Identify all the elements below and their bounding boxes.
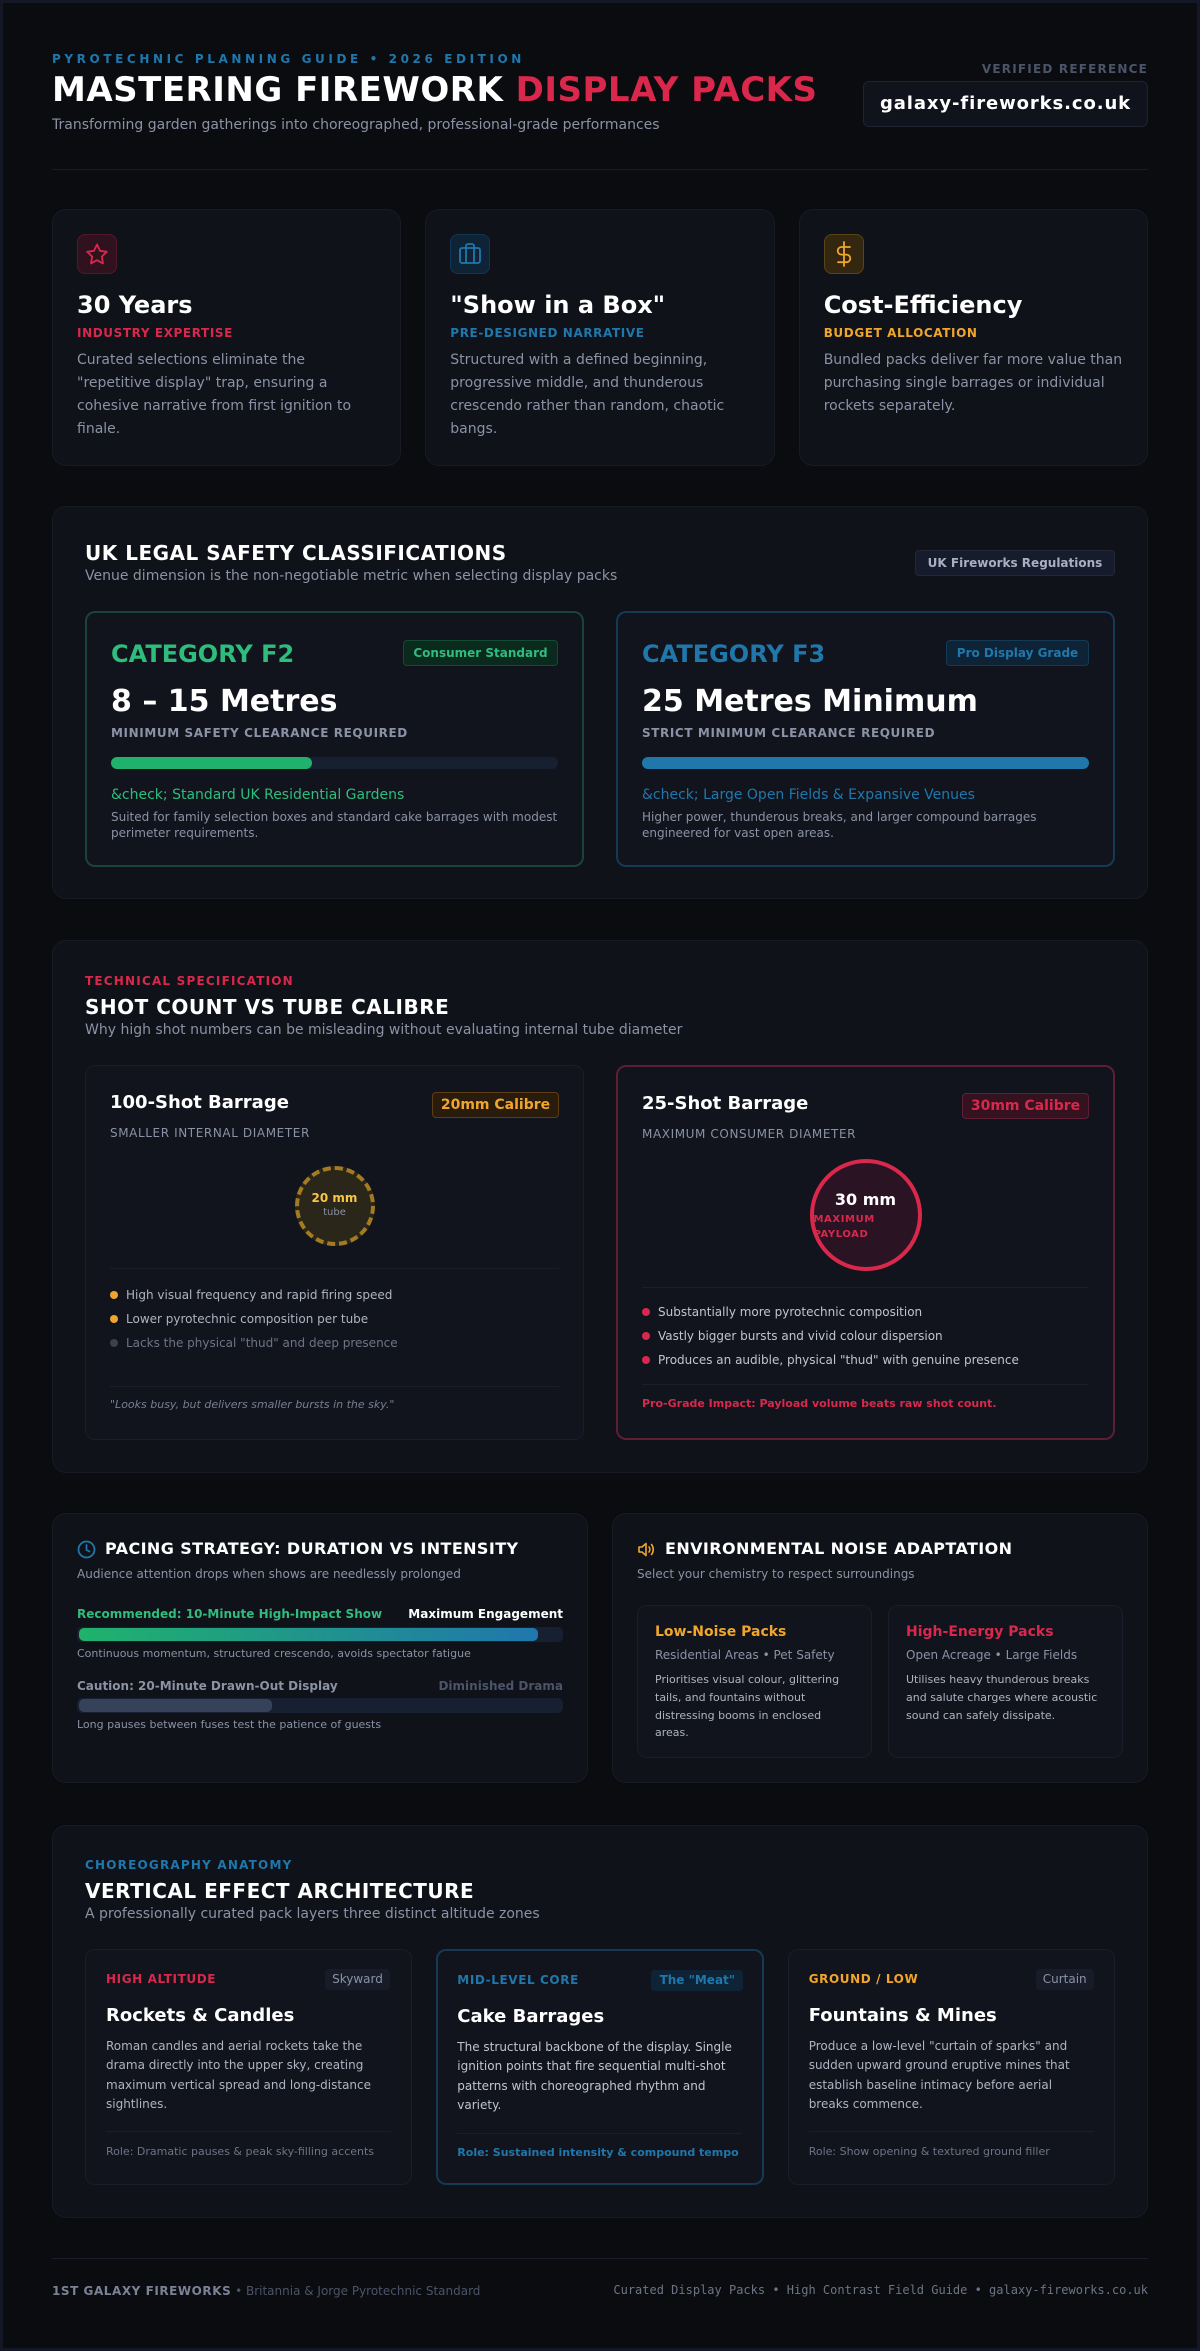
heading: SHOT COUNT VS TUBE CALIBRE — [85, 995, 449, 1019]
verified reference label: VERIFIED REFERENCE — [982, 62, 1148, 76]
label: Caution: 20-Minute Drawn-Out Display — [77, 1679, 338, 1693]
row: 10-minute show — [77, 1607, 563, 1660]
feature: Substantially more pyrotechnic composition — [658, 1305, 922, 1319]
badge: Consumer Standard — [413, 646, 548, 660]
feature: Vastly bigger bursts and vivid colour dispersion — [658, 1329, 943, 1343]
role: Role: Show opening & textured ground filler — [809, 2145, 1050, 2158]
badge: Curtain — [1043, 1972, 1087, 1986]
card text — [457, 2040, 732, 2112]
card subtitle: Open Acreage • Large Fields — [906, 1648, 1077, 1662]
card text: areas. — [655, 1726, 689, 1739]
value: Maximum Engagement — [408, 1607, 563, 1621]
card title: 100-Shot Barrage — [110, 1092, 289, 1113]
zone label: GROUND / LOW — [809, 1972, 918, 1986]
diameter label: 30 mm — [835, 1190, 896, 1209]
badge — [432, 1092, 559, 1118]
card: high-energy packs — [888, 1605, 1123, 1758]
stat text: Curated selections eliminate the — [77, 352, 305, 368]
zone label: MID-LEVEL CORE — [457, 1973, 579, 1987]
card text: tails, and fountains without — [655, 1691, 805, 1704]
subtitle: Transforming garden gatherings into choreographed, professional-grade performances — [52, 117, 660, 133]
panel: UK legal safety classifications — [52, 506, 1148, 899]
badge: regulations: UK Fireworks Regulations — [928, 556, 1102, 570]
description — [111, 810, 557, 840]
tube diagram: 30 mm — [810, 1159, 922, 1271]
card: 30 years — [52, 209, 401, 466]
stat text: progressive middle, and thunderous — [450, 375, 703, 391]
card text: Utilises heavy thunderous breaks — [906, 1673, 1089, 1686]
card text: maximum vertical spread and long-distance — [106, 2078, 371, 2092]
tube diagram: 20 mm — [294, 1166, 374, 1246]
venue: &check; Large Open Fields & Expansive Venues — [642, 787, 975, 803]
badge: 30mm Calibre — [971, 1098, 1080, 1114]
card: 100-shot barrage — [85, 1065, 584, 1440]
card text: sightlines. — [106, 2097, 167, 2111]
heading: ENVIRONMENTAL NOISE ADAPTATION — [665, 1539, 1012, 1558]
badge: 20mm Calibre — [441, 1097, 550, 1113]
panel: environmental noise adaptation — [612, 1513, 1148, 1783]
stat label: PRE-DESIGNED NARRATIVE — [450, 326, 645, 340]
eyebrow: CHOREOGRAPHY ANATOMY — [85, 1858, 292, 1872]
footnote: "Looks busy, but delivers smaller bursts in the sky." — [110, 1398, 394, 1411]
subheading: Select your chemistry to respect surroundings — [637, 1567, 915, 1581]
payload label: MAXIMUM — [814, 1214, 875, 1225]
badge — [962, 1093, 1089, 1119]
badge: regulations — [915, 550, 1115, 576]
zone label: HIGH ALTITUDE — [106, 1972, 216, 1986]
description: Higher power, thunderous breaks, and larger compound barrages — [642, 810, 1036, 824]
note: Continuous momentum, structured crescendo, avoids spectator fatigue — [77, 1647, 471, 1660]
subheading: Audience attention drops when shows are needlessly prolonged — [77, 1567, 461, 1581]
card: category F2 — [85, 611, 584, 867]
feature: Lacks the physical "thud" and deep presence — [126, 1336, 398, 1350]
payload label — [814, 1214, 875, 1240]
heading: UK LEGAL SAFETY CLASSIFICATIONS — [85, 541, 507, 565]
caption: MAXIMUM CONSUMER DIAMETER — [642, 1127, 856, 1141]
clearance bar — [642, 757, 1089, 769]
stat label: BUDGET ALLOCATION — [824, 326, 978, 340]
role: Role: Sustained intensity & compound tempo — [457, 2146, 739, 2159]
card: high altitude — [85, 1949, 412, 2185]
description: Suited for family selection boxes and standard cake barrages with modest — [111, 810, 557, 824]
card: 25-shot barrage — [616, 1065, 1115, 1440]
card title: Low-Noise Packs — [655, 1624, 786, 1640]
badge: Pro Display Grade — [957, 646, 1078, 660]
feature: Lower pyrotechnic composition per tube — [126, 1312, 368, 1326]
distance: 8 – 15 Metres — [111, 684, 338, 719]
card text: breaks commence. — [809, 2097, 923, 2111]
caption: STRICT MINIMUM CLEARANCE REQUIRED — [642, 726, 935, 740]
card title: Cake Barrages — [457, 2006, 604, 2027]
distance: 25 Metres Minimum — [642, 684, 978, 719]
clearance bar — [111, 757, 558, 769]
card text — [106, 2039, 371, 2111]
card text — [809, 2039, 1070, 2111]
card text: ignition points that fire sequential multi-shot — [457, 2059, 726, 2073]
stat text: Bundled packs deliver far more value than — [824, 352, 1122, 368]
card: show in a box — [425, 209, 775, 466]
icon: dollar — [824, 234, 864, 274]
icon: star — [77, 234, 117, 274]
subheading: Venue dimension is the non-negotiable metric when selecting display packs — [85, 568, 617, 584]
card: cost efficiency — [799, 209, 1148, 466]
card text: establish baseline intimacy before aerial — [809, 2078, 1052, 2092]
stat text — [77, 352, 351, 437]
card text: drama directly into the upper sky, creating — [106, 2058, 363, 2072]
heading: VERTICAL EFFECT ARCHITECTURE — [85, 1879, 474, 1903]
footnote: Pro-Grade Impact: Payload volume beats raw shot count. — [642, 1397, 996, 1410]
stat heading: "Show in a Box" — [450, 291, 665, 319]
badge: Skyward — [332, 1972, 383, 1986]
note: Long pauses between fuses test the patience of guests — [77, 1718, 381, 1731]
badge — [1036, 1969, 1094, 1990]
feature: High visual frequency and rapid firing speed — [126, 1288, 392, 1302]
domain box: galaxy-fireworks.co.uk — [880, 93, 1131, 114]
stat label: INDUSTRY EXPERTISE — [77, 326, 233, 340]
title: MASTERING FIREWORK DISPLAY PACKS — [52, 70, 818, 110]
footer — [52, 2258, 1148, 2298]
value: Diminished Drama — [438, 1679, 563, 1693]
panel: key facts cards — [52, 209, 1148, 466]
card text: sudden upward ground eruptive mines that — [809, 2058, 1070, 2072]
venue: &check; Standard UK Residential Gardens — [111, 787, 404, 803]
feature: Produces an audible, physical "thud" with genuine presence — [658, 1353, 1019, 1367]
card text — [906, 1673, 1097, 1722]
stat text: finale. — [77, 421, 120, 437]
row: 20-minute show — [77, 1679, 563, 1731]
stat text: "repetitive display" trap, ensuring a — [77, 375, 327, 391]
stat text: bangs. — [450, 421, 497, 437]
card: category F3 — [616, 611, 1115, 867]
eyebrow: PYROTECHNIC PLANNING GUIDE • 2026 EDITION — [52, 52, 525, 66]
card text: variety. — [457, 2098, 501, 2112]
badge — [946, 640, 1089, 666]
diameter label: 20 mm — [312, 1191, 357, 1205]
badge — [403, 640, 558, 666]
card text: patterns with choreographed rhythm and — [457, 2079, 705, 2093]
card text: Prioritises visual colour, glittering — [655, 1673, 839, 1686]
eyebrow: TECHNICAL SPECIFICATION — [85, 974, 294, 988]
description — [642, 810, 1036, 840]
card text — [655, 1673, 839, 1739]
panel: vertical effect architecture — [52, 1825, 1148, 2218]
badge — [651, 1970, 743, 1991]
feature list — [110, 1288, 398, 1350]
domain box — [863, 81, 1148, 127]
stat text: crescendo rather than random, chaotic — [450, 398, 724, 414]
category title: CATEGORY F2 — [111, 640, 294, 668]
tube label: tube — [323, 1207, 346, 1218]
panel: pacing strategy — [52, 1513, 588, 1783]
badge: The "Meat" — [660, 1973, 735, 1987]
header — [52, 52, 1148, 170]
card title: High-Energy Packs — [906, 1624, 1054, 1640]
card title: 25-Shot Barrage — [642, 1093, 808, 1114]
description: perimeter requirements. — [111, 826, 258, 840]
feature list — [642, 1305, 1019, 1367]
card title: Fountains & Mines — [809, 2005, 997, 2026]
card text: and salute charges where acoustic — [906, 1691, 1097, 1704]
brand line: 1ST GALAXY FIREWORKS • Britannia & Jorge Pyrotechnic Standard — [52, 2284, 480, 2298]
card: mid-level core — [436, 1949, 764, 2185]
heading: PACING STRATEGY: DURATION VS INTENSITY — [105, 1539, 519, 1558]
card subtitle: Residential Areas • Pet Safety — [655, 1648, 835, 1662]
label: Recommended: 10-Minute High-Impact Show — [77, 1607, 382, 1621]
icon: box — [450, 234, 490, 274]
card text: distressing booms in enclosed — [655, 1709, 821, 1722]
description: engineered for vast open areas. — [642, 826, 834, 840]
footer note: Curated Display Packs • High Contrast Field Guide • galaxy-fireworks.co.uk — [613, 2283, 1148, 2297]
stat text: cohesive narrative from first ignition to — [77, 398, 351, 414]
card title: Rockets & Candles — [106, 2005, 294, 2026]
stat heading: 30 Years — [77, 291, 193, 319]
stat text: Structured with a defined beginning, — [450, 352, 707, 368]
badge — [325, 1969, 390, 1990]
card text: Roman candles and aerial rockets take the — [106, 2039, 362, 2053]
subheading: A professionally curated pack layers three distinct altitude zones — [85, 1906, 540, 1922]
icon: clock — [78, 1540, 96, 1558]
icon: speaker — [638, 1542, 654, 1556]
payload label: PAYLOAD — [814, 1229, 868, 1240]
caption: MINIMUM SAFETY CLEARANCE REQUIRED — [111, 726, 408, 740]
stat text: purchasing single barrages or individual — [824, 375, 1105, 391]
stat text — [450, 352, 724, 437]
card text: The structural backbone of the display. Single — [457, 2040, 732, 2054]
subheading: Why high shot numbers can be misleading without evaluating internal tube diameter — [85, 1022, 682, 1038]
stat text: rockets separately. — [824, 398, 955, 414]
role: Role: Dramatic pauses & peak sky-filling accents — [106, 2145, 374, 2158]
card text: sound can safely dissipate. — [906, 1709, 1055, 1722]
duration bar — [77, 1698, 563, 1713]
panel: shot count vs tube calibre — [52, 940, 1148, 1473]
stat heading: Cost-Efficiency — [824, 291, 1022, 319]
card: low-noise packs — [637, 1605, 872, 1758]
caption: SMALLER INTERNAL DIAMETER — [110, 1126, 310, 1140]
card: ground / low — [788, 1949, 1115, 2185]
category title: CATEGORY F3 — [642, 640, 825, 668]
duration bar — [77, 1627, 563, 1642]
card text: Produce a low-level "curtain of sparks" and — [809, 2039, 1067, 2053]
stat text — [824, 352, 1122, 414]
